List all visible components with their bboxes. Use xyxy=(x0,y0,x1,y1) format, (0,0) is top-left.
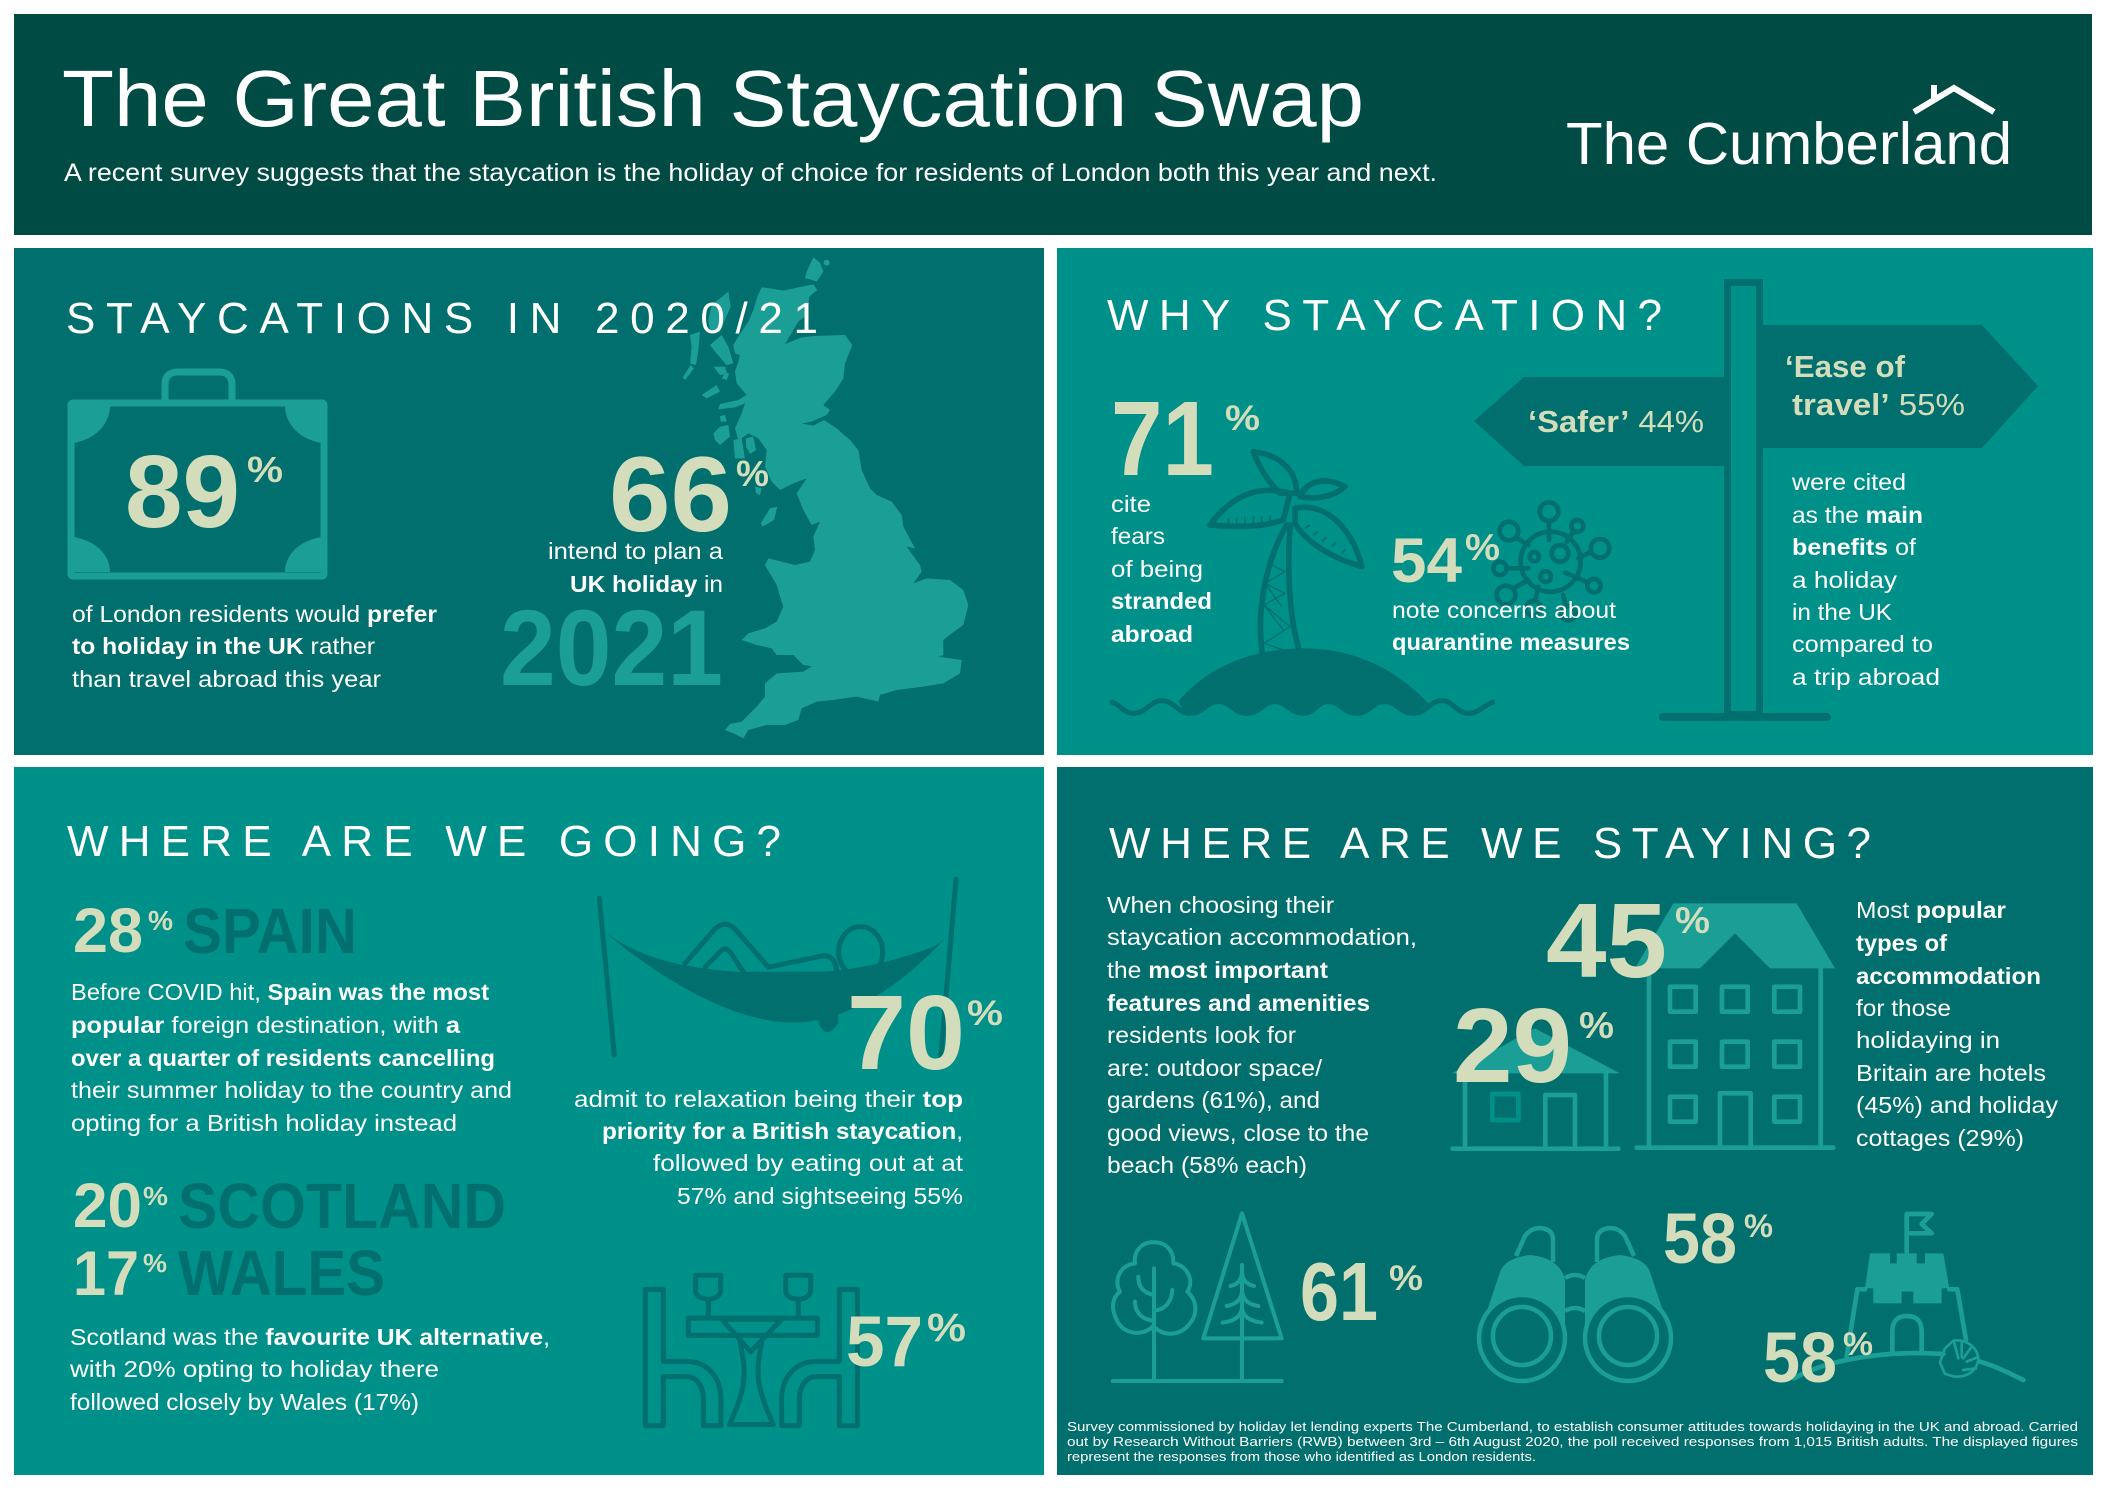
panel: staycations in 2020/21 xyxy=(14,248,1044,755)
text: popular accommodation: Britain are hotels xyxy=(1856,1060,2046,1086)
map of Great Britain xyxy=(683,257,968,738)
text: main benefits: were cited xyxy=(1791,469,1906,495)
text: intend to plan: intend to plan a xyxy=(548,538,723,564)
text: important features xyxy=(1107,892,1417,1178)
stat: 28% Spain: SPAIN xyxy=(183,895,357,967)
text: prefer UK holiday: than travel abroad this year xyxy=(72,666,381,692)
text: intend to plan xyxy=(548,538,723,597)
text: prefer UK holiday: to holiday in the UK rather xyxy=(72,633,375,659)
text: important features: are: outdoor space/ xyxy=(1107,1055,1323,1081)
title: The Great British Staycation Swap xyxy=(62,54,1364,143)
icon: hammock xyxy=(599,879,956,1067)
text: main benefits: compared to xyxy=(1792,631,1933,657)
stat: 28% Spain: 28 xyxy=(73,896,143,966)
text: main benefits: a trip abroad xyxy=(1792,664,1940,690)
stat: 89%: 89 xyxy=(125,434,240,549)
text: popular accommodation: cottages (29%) xyxy=(1856,1125,2024,1151)
stat: 17% Wales: WALES xyxy=(178,1237,385,1309)
text: prefer UK holiday: of London residents would prefer xyxy=(72,601,437,627)
text: intend to plan: UK holiday in xyxy=(570,571,723,597)
footnote: represent the responses from those who identified as London residents. xyxy=(1067,1449,1536,1464)
sign text: ease of travel xyxy=(1785,349,1965,422)
stat: 66%: 66 xyxy=(609,434,732,554)
text: important features: residents look for xyxy=(1107,1022,1296,1048)
text: popular accommodation: Most popular xyxy=(1856,897,2006,923)
text: important features: the most important xyxy=(1107,957,1328,983)
text: Spain: their summer holiday to the country and xyxy=(71,1077,512,1103)
logo: The Cumberland: The Cumberland xyxy=(1566,111,2012,177)
text: top priority xyxy=(574,1086,964,1209)
heading: STAYCATIONS IN 2020/21 xyxy=(66,294,818,343)
stat: 58% sandcastle: % xyxy=(1843,1326,1873,1362)
text: quarantine measures: note concerns about xyxy=(1392,597,1617,623)
stat: 66%: % xyxy=(736,453,769,494)
stat: 20% Scotland: 20 xyxy=(73,1171,142,1241)
text: Spain: Before COVID hit, Spain was the most xyxy=(71,979,489,1005)
text: Spain xyxy=(71,979,512,1136)
text: popular accommodation: types of xyxy=(1856,930,1947,956)
panel: where are we going xyxy=(14,767,1044,1475)
text: stranded abroad: cite xyxy=(1111,491,1151,517)
stat: 61%: 61 xyxy=(1300,1245,1378,1338)
text: main benefits: as the main xyxy=(1792,502,1923,528)
stat: 29%: 29 xyxy=(1453,987,1572,1105)
icon: trees xyxy=(1113,1213,1282,1381)
stat: 54%: 54 xyxy=(1391,526,1462,596)
stat: 28% Spain xyxy=(73,895,357,967)
icon: hotel building xyxy=(1635,903,1835,1148)
stat: 58% binoculars: % xyxy=(1744,1208,1773,1244)
icon: dining table xyxy=(645,1275,857,1426)
stat: 57%: % xyxy=(927,1306,966,1350)
text: top priority: admit to relaxation being their top xyxy=(574,1086,963,1112)
stat: 89%: % xyxy=(247,449,283,490)
stat: 70%: % xyxy=(967,994,1003,1033)
sign text: ease of travel: ‘Ease of xyxy=(1785,349,1906,384)
icon: palm tree island xyxy=(1110,452,1495,713)
sign text: safer: ‘Safer’ 44% xyxy=(1528,404,1704,439)
stat: 54%: % xyxy=(1465,527,1500,568)
stat: 17% Wales: 17 xyxy=(73,1239,139,1309)
stat: 45%: % xyxy=(1675,900,1710,941)
icon: cottage xyxy=(1452,1028,1620,1149)
footnote xyxy=(1067,1419,2079,1464)
text: popular accommodation: for those xyxy=(1856,995,1951,1021)
text: main benefits: a holiday xyxy=(1792,567,1898,593)
stat: 57% xyxy=(846,1303,966,1382)
stat: 28% Spain: % xyxy=(148,905,173,936)
heading: WHERE ARE WE GOING? xyxy=(67,817,781,866)
panel: where are we staying xyxy=(1057,767,2093,1475)
text: Spain: over a quarter of residents cancelling xyxy=(71,1045,495,1071)
stat: 57%: 57 xyxy=(846,1303,923,1382)
heading: WHERE ARE WE STAYING? xyxy=(1109,819,1871,868)
text: important features: staycation accommodation, xyxy=(1107,924,1417,950)
stat: 54% xyxy=(1391,526,1500,596)
sign text: ease of travel: travel’ 55% xyxy=(1792,387,1965,422)
text: Spain: opting for a British holiday instead xyxy=(71,1110,457,1136)
text: stranded abroad: abroad xyxy=(1111,621,1193,647)
text: Scotland and Wales: followed closely by Wales (17%) xyxy=(70,1389,419,1415)
text: important features: beach (58% each) xyxy=(1107,1152,1307,1178)
text: main benefits xyxy=(1791,469,1940,690)
text: Scotland and Wales xyxy=(69,1324,550,1415)
panel: why staycation xyxy=(1057,248,2093,755)
text: popular accommodation xyxy=(1856,897,2059,1151)
text: stranded abroad: fears xyxy=(1111,523,1165,549)
stat: 20% Scotland: % xyxy=(143,1181,168,1211)
text: top priority: priority for a British staycation , xyxy=(602,1118,963,1144)
icon: virus xyxy=(1493,502,1609,621)
year 2021: 2021 xyxy=(500,587,723,708)
text: important features: good views, close to the xyxy=(1107,1120,1369,1146)
text: Spain: popular foreign destination, with a xyxy=(71,1012,460,1038)
text: stranded abroad: stranded xyxy=(1111,588,1212,614)
text: important features: When choosing their xyxy=(1107,892,1334,918)
text: stranded abroad xyxy=(1111,491,1212,647)
icon: signpost xyxy=(1474,282,2038,721)
text: popular accommodation: (45%) and holiday xyxy=(1856,1092,2059,1118)
stat: 58% sandcastle: 58 xyxy=(1763,1319,1837,1398)
text: main benefits: in the UK xyxy=(1792,599,1893,625)
text: top priority: followed by eating out at at xyxy=(653,1150,964,1176)
icon: sandcastle and shell xyxy=(1794,1214,2023,1380)
subtitle: A recent survey suggests that the staycation is the holiday of choice for residents of London both this year and next. xyxy=(64,159,1437,187)
text: quarantine measures xyxy=(1392,597,1630,655)
stat: 17% Wales: % xyxy=(143,1248,167,1278)
panel: header xyxy=(14,14,2092,235)
stat: 29%: % xyxy=(1579,1005,1614,1046)
text: Scotland and Wales: with 20% opting to holiday there xyxy=(69,1356,439,1382)
text: main benefits: benefits of xyxy=(1792,534,1917,560)
text: important features: features and amenities xyxy=(1107,990,1370,1016)
text: stranded abroad: of being xyxy=(1111,556,1203,582)
icon: suitcase xyxy=(71,372,324,576)
text: prefer UK holiday xyxy=(72,601,437,692)
stat: 71%: 71 xyxy=(1111,380,1214,498)
stat: 58% binoculars: 58 xyxy=(1663,1200,1737,1279)
text: quarantine measures: quarantine measures xyxy=(1392,629,1630,655)
stat: 45%: 45 xyxy=(1546,882,1667,1000)
text: Scotland and Wales: Scotland was the favourite UK alternative , xyxy=(70,1324,550,1350)
footnote: Survey commissioned by holiday let lending experts The Cumberland, to establish consumer attitudes towards holidaying in the UK and abroad. Carried xyxy=(1067,1419,2078,1434)
icon: binoculars xyxy=(1478,1228,1672,1381)
heading: WHY STAYCATION? xyxy=(1107,291,1662,340)
stat: 70%: 70 xyxy=(847,974,965,1092)
stat: 17% Wales xyxy=(73,1237,385,1309)
text: popular accommodation: accommodation xyxy=(1856,963,2041,989)
text: popular accommodation: holidaying in xyxy=(1856,1027,2000,1053)
stat: 71%: % xyxy=(1225,399,1260,438)
stat: 61%: % xyxy=(1389,1259,1423,1298)
text: important features: gardens (61%), and xyxy=(1107,1087,1320,1113)
text: top priority: 57% and sightseeing 55% xyxy=(677,1183,963,1209)
stat: 20% Scotland: SCOTLAND xyxy=(178,1170,506,1242)
footnote: out by Research Without Barriers (RWB) between 3rd – 6th August 2020, the poll received responses from 1,015 British adults. The displayed figures xyxy=(1067,1434,2079,1449)
